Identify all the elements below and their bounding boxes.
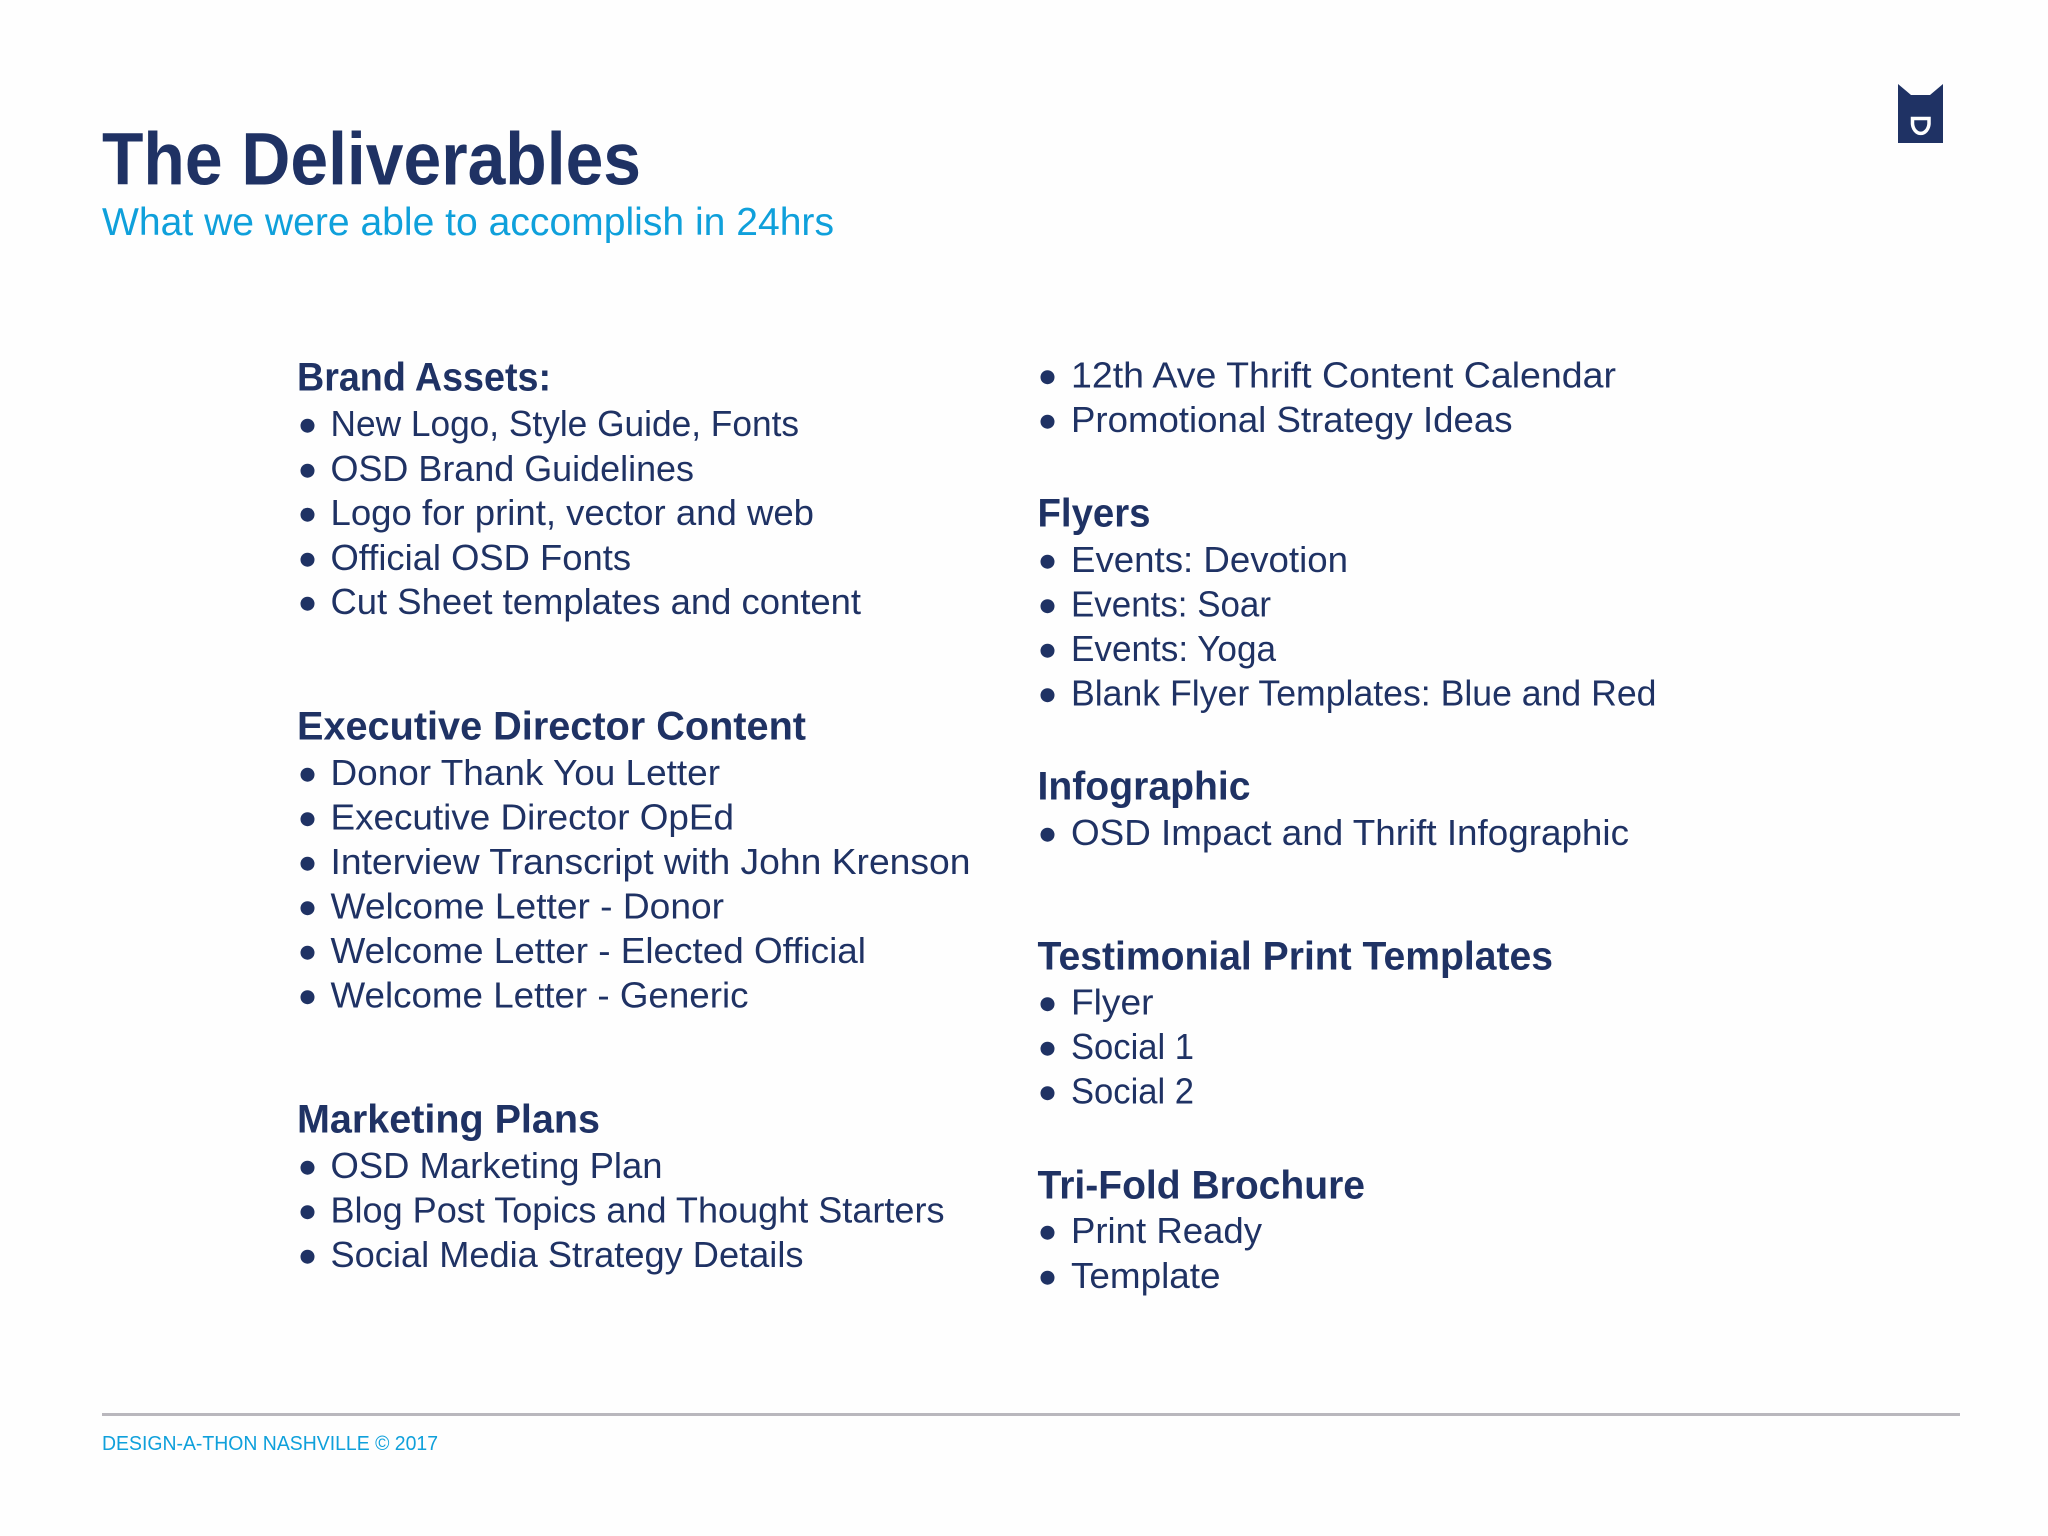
heading: marketing plans: Marketing Plans [297, 1098, 600, 1142]
list item: Template [1071, 1255, 1220, 1296]
list item: Official OSD Fonts [330, 537, 631, 578]
list item: Blank Flyer Templates: Blue and Red [1071, 672, 1656, 714]
list item: Cut Sheet templates and content [330, 581, 861, 622]
list item: OSD Brand Guidelines [330, 448, 694, 489]
heading: executive director content: Executive Director Content [297, 704, 806, 748]
heading: tri-fold brochure: Tri-Fold Brochure [1038, 1164, 1365, 1208]
list item: OSD Marketing Plan [330, 1145, 662, 1186]
footer credit: DESIGN-A-THON NASHVILLE © 2017 [102, 1433, 438, 1455]
heading: infographic: Infographic [1038, 764, 1250, 808]
list item: Events: Yoga [1071, 628, 1277, 669]
list item: Welcome Letter - Generic [330, 974, 748, 1016]
panel: executive director content [297, 704, 970, 1016]
panel: testimonial print templates [1038, 934, 1553, 1112]
list item: Executive Director OpEd [330, 796, 734, 838]
list item: Donor Thank You Letter [330, 752, 720, 793]
list item: Blog Post Topics and Thought Starters [330, 1190, 944, 1230]
list item: Social Media Strategy Details [330, 1234, 804, 1275]
list item: Events: Devotion [1071, 539, 1348, 580]
list item: Interview Transcript with John Krenson [330, 841, 970, 882]
list item: Logo for print, vector and web [330, 492, 814, 533]
subtitle: What we were able to accomplish in 24hrs [102, 201, 834, 244]
list item: Flyer [1071, 982, 1154, 1022]
list item: Social 2 [1071, 1070, 1194, 1112]
title: The Deliverables [102, 118, 641, 200]
list item: New Logo, Style Guide, Fonts [330, 403, 799, 444]
panel: marketing plans [297, 1098, 944, 1275]
list item: Welcome Letter - Elected Official [330, 930, 866, 971]
list item: Events: Soar [1071, 584, 1271, 624]
heading: brand assets: Brand Assets: [297, 356, 551, 400]
panel: brand assets [297, 356, 861, 622]
list item: Social 1 [1071, 1026, 1194, 1067]
heading: flyers: Flyers [1038, 492, 1150, 536]
list item: 12th Ave Thrift Content Calendar [1071, 354, 1616, 396]
panel: tri-fold brochure [1038, 1164, 1365, 1296]
list item: OSD Impact and Thrift Infographic [1071, 812, 1629, 853]
list item: Welcome Letter - Donor [330, 886, 724, 926]
panel: infographic [1038, 764, 1629, 853]
heading: testimonial print templates: Testimonial Print Templates [1038, 934, 1553, 978]
panel: marketing plans continued [1040, 354, 1616, 440]
panel: flyers [1038, 492, 1656, 714]
list item: Promotional Strategy Ideas [1071, 399, 1512, 440]
list item: Print Ready [1071, 1210, 1262, 1251]
icon: cat-eared D logo [1898, 84, 1943, 143]
